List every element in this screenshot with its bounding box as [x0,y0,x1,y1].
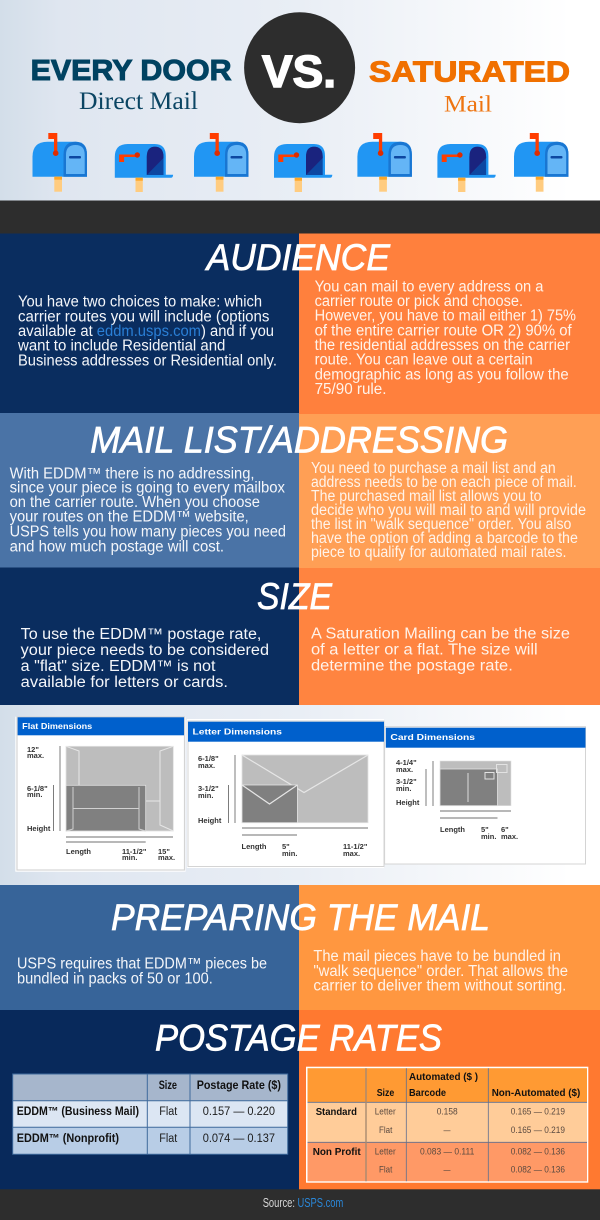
text: size EDDM: your piece needs to be considered [21,642,269,659]
text: audience EDDM: You have two choices to make: which [18,294,262,311]
diagram: flat dimensions: min. [27,790,42,799]
diagram: card dimensions: 3-1/2" [396,777,417,786]
icon: open mailbox 3 [437,144,496,192]
table: saturation rates: 0.158 [437,1107,458,1118]
text: size EDDM: To use the EDDM™ postage rate, [21,626,261,643]
text: mail list EDDM: USPS tells you how many pieces you need [10,524,286,540]
heading: preparing the mail: PREPARING THE MAIL [111,897,490,938]
diagram: flat dimensions: Flat Dimensions [22,721,92,731]
table: EDDM rates: 0.157 — 0.220 [203,1106,275,1118]
dark band [0,200,600,234]
text: preparing EDDM: USPS requires that EDDM™ pieces be [17,955,267,972]
text: mail list saturated: address needs to be on each piece of mail. [311,474,577,491]
panel: mail list/addressing [0,413,600,568]
diagram: letter dimensions [187,719,384,868]
diagram: letter dimensions: max. [343,849,360,858]
table: saturation rates: 0.083 — 0.111 [420,1146,474,1157]
text: audience saturated: route. You can leave out a certain [315,352,533,369]
table: saturation rates: Automated ($ ) [409,1071,478,1083]
title: Every Door Direct Mail: EVERY DOOR [31,55,232,87]
text: audience saturated: demographic as long as you follow the [315,366,569,383]
text: preparing saturated: The mail pieces have to be bundled in [313,948,561,965]
text: mail list saturated: have the option of adding a barcode to the [311,530,578,547]
table: EDDM rates: EDDM™ (Business Mail) [17,1106,139,1118]
table: EDDM rates: EDDM™ (Nonprofit) [17,1133,119,1145]
table: saturation rates: 0.082 — 0.136 [511,1146,565,1157]
diagram: card dimensions: Length [440,825,465,834]
panel: size [0,568,600,705]
heading: audience: AUDIENCE [205,237,391,278]
header background [0,0,600,201]
text: size EDDM: a "flat" size. EDDM™ is not [21,658,216,675]
diagram: flat dimensions [15,717,186,872]
text: mail list saturated [311,460,586,561]
table: saturation rates: Non-Automated ($) [492,1087,580,1099]
text: audience saturated: You can mail to every address on a [315,278,544,295]
text: size saturated [311,625,570,674]
icon: closed mailbox 3 [357,133,412,192]
title: Saturated Mail [369,56,570,116]
diagram: flat dimensions: 11-1/2" [122,847,147,856]
text: audience saturated: carrier route or pick and choose. [315,293,523,310]
diagram: letter dimensions: min. [198,791,213,800]
text: preparing EDDM: bundled in packs of 50 or 100. [17,970,213,987]
diagram: card dimensions: Height [396,798,420,807]
panel: dimension diagrams [0,705,600,885]
diagram: letter dimensions: Length [242,842,267,851]
table: saturation rates: Letter [375,1146,396,1157]
diagram: letter dimensions: Height [198,816,222,825]
text: audience saturated: However, you have to mail either 1) 75% [315,308,576,325]
table: saturation rates: Non Profit [313,1146,361,1158]
title: Every Door Direct Mail: Direct Mail [79,88,198,115]
text: size saturated: determine the postage rate. [311,657,513,674]
text: audience saturated: the residential addresses on the carrier [315,337,570,354]
table: saturation rates: Flat [379,1165,393,1176]
text: mail list saturated: You need to purchase a mail list and an [311,460,556,477]
diagram: letter dimensions: min. [282,849,297,858]
diagram: letter dimensions: max. [198,761,215,770]
table: saturation rates: — [444,1125,451,1136]
table: saturation rates: 0.082 — 0.136 [511,1165,565,1176]
table: saturation rates [306,1067,588,1183]
text: mail list saturated: The purchased mail list allows you to [311,488,542,505]
text: mail list saturated: decide who you will mail to and will provide [311,502,586,519]
diagram: flat dimensions: max. [27,751,44,760]
text: preparing EDDM [17,955,267,987]
text: mail list EDDM: since your piece is going to every mailbox [10,480,285,497]
table: EDDM rates [13,1074,288,1154]
text: mail list saturated: piece to qualify for automated mail rates. [311,544,566,561]
text: audience EDDM: available at eddm.usps.com) and if you [18,323,274,340]
diagram: letter dimensions: 5" [282,842,290,851]
text: mail list EDDM: on the carrier route. When you choose [10,494,260,511]
diagram: flat dimensions: 15" [158,847,170,856]
title: Saturated Mail: SATURATED [369,56,570,88]
table: saturation rates: Size [377,1087,394,1099]
table: EDDM rates: Size [159,1080,177,1092]
diagram: letter dimensions: 3-1/2" [198,784,219,793]
text: size saturated: of a letter or a flat. The size will [311,641,538,658]
diagram: flat dimensions: Length [66,847,91,856]
table: saturation rates: Standard [316,1106,357,1118]
table: saturation rates: Flat [379,1125,393,1136]
diagram: flat dimensions: 12" [27,745,39,754]
text: size EDDM [21,626,269,691]
diagram: flat dimensions: max. [158,853,175,862]
text: mail list EDDM: With EDDM™ there is no addressing, [10,465,254,482]
diagram: card dimensions: Card Dimensions [390,732,475,742]
vs badge: VS. [262,46,336,97]
table: saturation rates: Barcode [409,1087,446,1099]
icon: closed mailbox 1 [32,133,87,192]
vs badge [244,12,355,123]
text: preparing saturated: "walk sequence" order. That allows the [313,963,568,980]
text: audience saturated [315,278,576,398]
text: mail list EDDM: your routes on the EDDM™ website, [10,508,249,526]
diagram: card dimensions: min. [481,832,496,841]
diagram: flat dimensions: 6-1/8" [27,784,48,793]
text: audience saturated: 75/90 rule. [315,381,386,398]
icon: open mailbox 2 [274,144,332,192]
diagram: flat dimensions: min. [122,853,137,862]
diagram: card dimensions: max. [501,832,518,841]
table: EDDM rates: 0.074 — 0.137 [203,1133,275,1145]
icon: closed mailbox 4 [514,133,568,192]
text: preparing saturated [313,948,568,995]
table: saturation rates: 0.165 — 0.219 [511,1107,565,1118]
text: mail list EDDM: and how much postage will cost. [10,538,224,555]
text: mail list EDDM [10,465,286,555]
table: saturation rates: Letter [375,1107,396,1118]
panel: preparing the mail [0,885,600,1010]
table: EDDM rates: Postage Rate ($) [197,1080,281,1092]
text: audience EDDM: want to include Residential and [17,338,225,355]
diagram: letter dimensions: Letter Dimensions [192,726,282,736]
heading: size: SIZE [257,576,333,617]
diagram: letter dimensions: 6-1/8" [198,754,219,763]
diagram: card dimensions: max. [396,765,413,774]
table: EDDM rates: Flat [159,1133,178,1145]
icon: open mailbox 1 [115,144,173,192]
text: audience EDDM: Business addresses or Residential only. [18,352,277,369]
diagram: card dimensions: min. [396,784,411,793]
table: EDDM rates: Flat [159,1106,178,1118]
footer: source [0,1189,600,1220]
title: Every Door Direct Mail [31,55,232,115]
text: size saturated: A Saturation Mailing can be the size [311,625,570,642]
panel: audience [0,234,600,414]
diagram: card dimensions: 4-1/4" [396,758,417,767]
table: saturation rates: — [444,1165,451,1176]
text: audience saturated: of the entire carrier route OR 2) 90% of [315,322,572,339]
heading: mail list/addressing: MAIL LIST/ADDRESSING [90,419,508,460]
icon row: mailboxes [32,133,568,192]
diagram: flat dimensions: Height [27,824,51,833]
icon: closed mailbox 2 [194,133,248,192]
panel: postage rates [0,1010,600,1190]
text: preparing saturated: carrier to deliver them without sorting. [313,978,566,995]
diagram: letter dimensions: 11-1/2" [343,842,368,851]
text: audience EDDM: carrier routes you will include (options [18,308,270,325]
text: mail list saturated: the list in "walk sequence" order. You also [311,516,571,533]
title: Saturated Mail: Mail [444,92,492,116]
diagram: card dimensions [385,727,586,864]
footer: source: Source: USPS.com [263,1196,343,1210]
text: size EDDM: available for letters or cards. [21,674,228,691]
text: audience EDDM [17,294,277,369]
diagram: card dimensions: 5" [481,825,489,834]
heading: postage rates: POSTAGE RATES [155,1018,442,1059]
table: saturation rates: 0.165 — 0.219 [511,1125,565,1136]
diagram: card dimensions: 6" [501,825,509,834]
